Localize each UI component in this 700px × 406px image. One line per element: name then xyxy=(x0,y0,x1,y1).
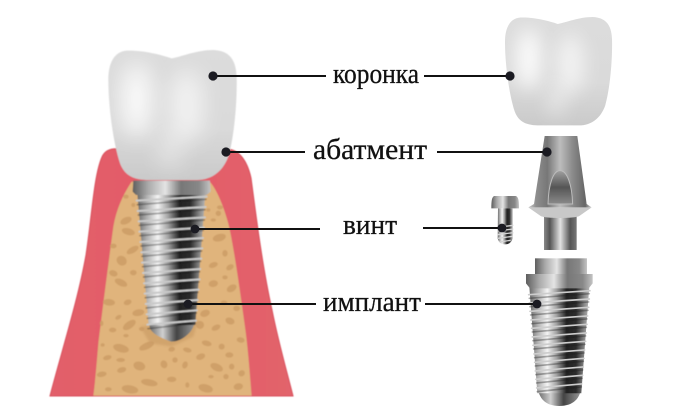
marker dots xyxy=(221,147,552,157)
implant shadow on bone xyxy=(140,320,198,347)
implant body xyxy=(529,287,589,393)
label row: имплант xyxy=(184,287,541,318)
marker dots xyxy=(208,71,515,81)
label row: абатмент xyxy=(221,133,552,166)
leader line right xyxy=(437,151,547,153)
illustration: separate implant xyxy=(526,258,593,406)
implant tip xyxy=(538,387,581,406)
implant collar xyxy=(133,181,211,195)
implant body xyxy=(137,193,205,325)
illustration: separate screw xyxy=(491,196,519,244)
leader line left xyxy=(226,151,305,153)
crown on implant xyxy=(108,50,237,180)
implant tip xyxy=(149,322,195,342)
label: имплант xyxy=(323,287,421,318)
leader line left xyxy=(195,228,320,230)
gum tissue xyxy=(50,149,293,396)
abutment neck xyxy=(544,215,577,250)
implant in bone xyxy=(133,181,211,342)
marker dots xyxy=(191,224,506,233)
marker dots xyxy=(184,300,541,308)
illustration: separate crown xyxy=(505,17,612,125)
label: винт xyxy=(343,210,397,241)
jaw bone xyxy=(93,182,252,396)
leader line right xyxy=(425,303,537,305)
label: абатмент xyxy=(313,133,427,166)
illustration: assembled implant in jaw xyxy=(50,50,293,396)
leader line right xyxy=(423,227,502,229)
implant flange xyxy=(526,274,593,288)
abutment cone xyxy=(528,136,592,207)
screw head xyxy=(491,196,519,208)
leader line left xyxy=(188,303,316,305)
leader line left xyxy=(213,75,326,77)
abutment cutaway xyxy=(548,171,573,204)
screw shank xyxy=(498,208,513,244)
illustration: separate abutment xyxy=(528,136,592,250)
implant top socket xyxy=(535,258,587,275)
bone pores xyxy=(96,195,246,395)
label row: коронка xyxy=(208,59,515,90)
leader line right xyxy=(424,75,510,77)
screw threads xyxy=(497,225,513,242)
label row: винт xyxy=(191,210,506,241)
label: коронка xyxy=(333,59,420,90)
implant threads xyxy=(529,291,590,392)
implant threads xyxy=(137,197,207,329)
abutment flange xyxy=(528,207,592,218)
